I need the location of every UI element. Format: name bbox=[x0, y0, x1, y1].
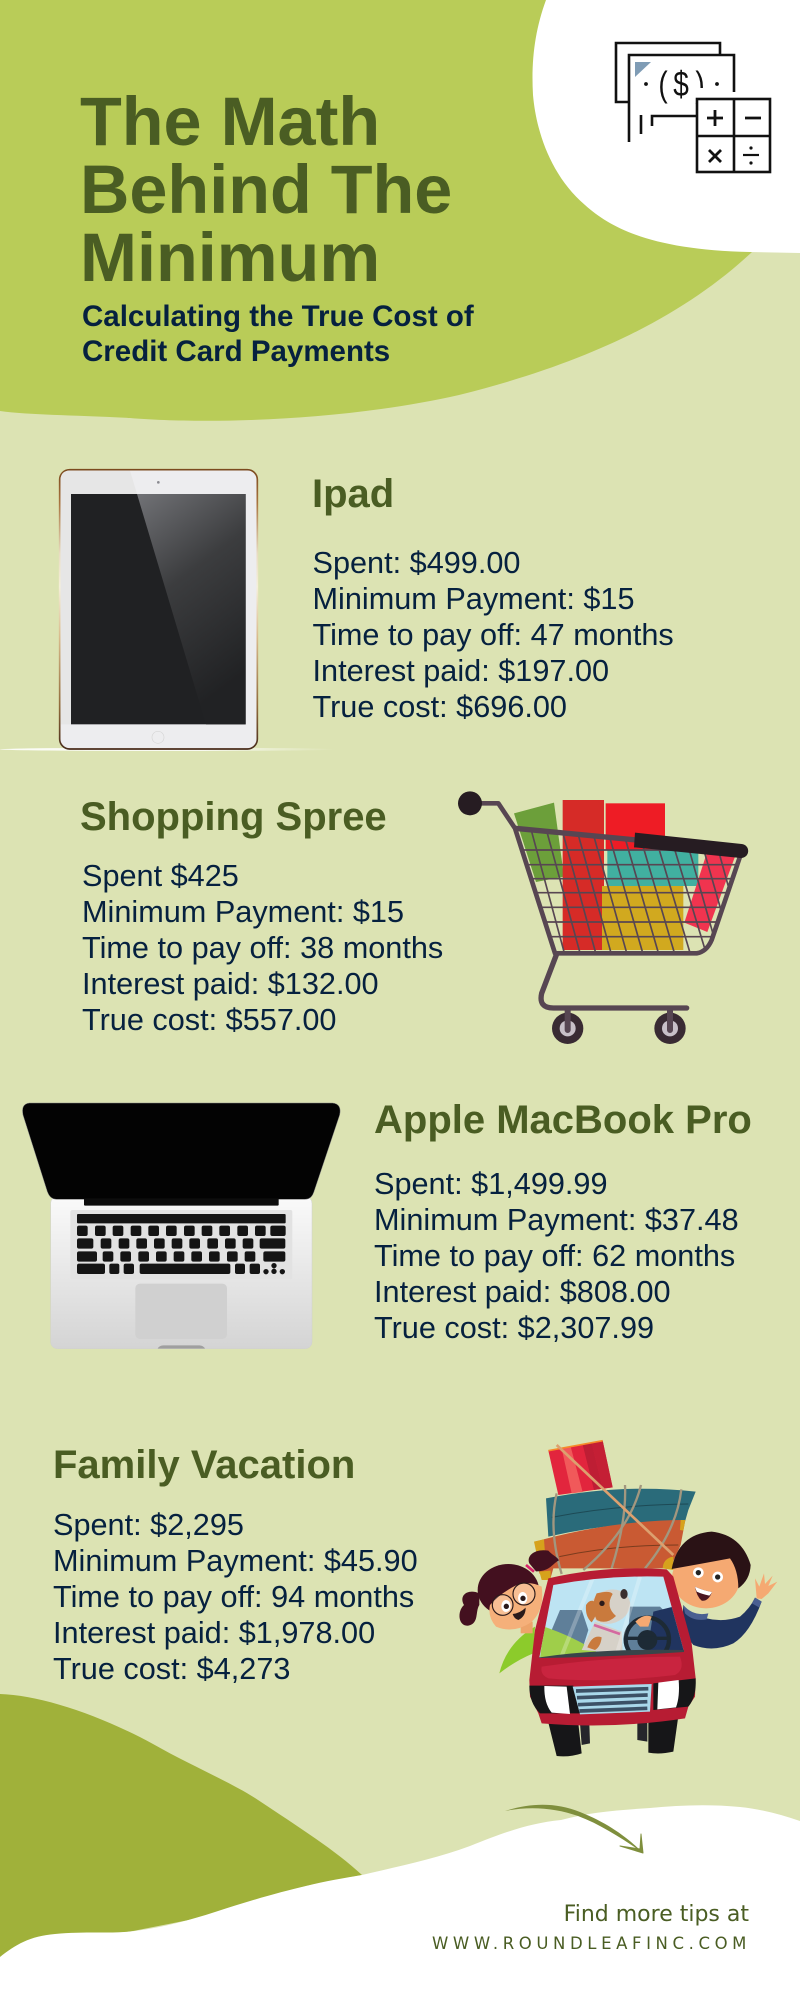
item: apple macbook pro bbox=[374, 1098, 752, 1345]
item: family vacation: Spent: $2,295 bbox=[53, 1508, 244, 1542]
item: apple macbook pro: Apple MacBook Pro bbox=[374, 1098, 752, 1142]
item: shopping spree: Interest paid: $132.00 bbox=[82, 967, 379, 1001]
item: shopping spree: Shopping Spree bbox=[80, 795, 387, 839]
item: apple macbook pro: Interest paid: $808.00 bbox=[374, 1275, 671, 1309]
header green blob bbox=[0, 0, 800, 421]
item: ipad: Ipad bbox=[312, 472, 394, 516]
title bbox=[80, 84, 452, 296]
footer dark green blob bbox=[0, 1694, 362, 1957]
girl bbox=[459, 1550, 559, 1673]
boy bbox=[672, 1532, 777, 1648]
item: shopping spree bbox=[80, 795, 443, 1037]
item: shopping spree: True cost: $557.00 bbox=[82, 1003, 336, 1037]
icon: money and calculator: ) bbox=[695, 64, 705, 104]
item: family vacation: True cost: $4,273 bbox=[53, 1652, 290, 1686]
item: shopping spree: Spent $425 bbox=[82, 859, 239, 893]
icon: money and calculator: ( bbox=[658, 64, 668, 104]
subtitle: Calculating the True Cost of bbox=[82, 300, 474, 333]
footer text: Find more tips at bbox=[564, 1902, 749, 1927]
footer text bbox=[432, 1902, 751, 1953]
item: apple macbook pro: True cost: $2,307.99 bbox=[374, 1311, 654, 1345]
footer white wave bbox=[0, 1805, 800, 2000]
header white blob bbox=[533, 0, 800, 253]
icon: laptop bbox=[23, 1103, 340, 1349]
item: ipad bbox=[312, 472, 674, 724]
item: ipad: Time to pay off: 47 months bbox=[312, 618, 674, 652]
item: family vacation: Time to pay off: 94 months bbox=[53, 1580, 414, 1614]
item: apple macbook pro: Minimum Payment: $37.48 bbox=[374, 1203, 739, 1237]
icon: money and calculator: $ bbox=[673, 64, 689, 104]
item: family vacation bbox=[53, 1443, 418, 1686]
icon: family car with luggage bbox=[459, 1441, 777, 1756]
title: The Math bbox=[80, 84, 380, 160]
item: shopping spree: Minimum Payment: $15 bbox=[82, 895, 404, 929]
item: family vacation: Minimum Payment: $45.90 bbox=[53, 1544, 418, 1578]
title: Minimum bbox=[80, 220, 380, 296]
item: shopping spree: Time to pay off: 38 months bbox=[82, 931, 443, 965]
icon: money and calculator bbox=[616, 43, 770, 172]
arrow bbox=[505, 1805, 643, 1853]
item: ipad: Minimum Payment: $15 bbox=[312, 582, 635, 616]
icon: tablet bbox=[0, 470, 337, 751]
subtitle: Credit Card Payments bbox=[82, 335, 390, 368]
car bbox=[529, 1568, 696, 1756]
item: apple macbook pro: Time to pay off: 62 months bbox=[374, 1239, 735, 1273]
item: family vacation: Interest paid: $1,978.00 bbox=[53, 1616, 375, 1650]
title: Behind The bbox=[80, 152, 452, 228]
footer text: WWW.ROUNDLEAFINC.COM bbox=[432, 1934, 751, 1953]
icon: shopping cart bbox=[458, 791, 748, 1044]
item: ipad: Spent: $499.00 bbox=[312, 546, 520, 580]
luggage stack bbox=[534, 1441, 696, 1580]
subtitle bbox=[82, 300, 474, 368]
item: ipad: Interest paid: $197.00 bbox=[312, 654, 609, 688]
item: ipad: True cost: $696.00 bbox=[312, 690, 567, 724]
item: family vacation: Family Vacation bbox=[53, 1443, 355, 1487]
item: apple macbook pro: Spent: $1,499.99 bbox=[374, 1167, 608, 1201]
